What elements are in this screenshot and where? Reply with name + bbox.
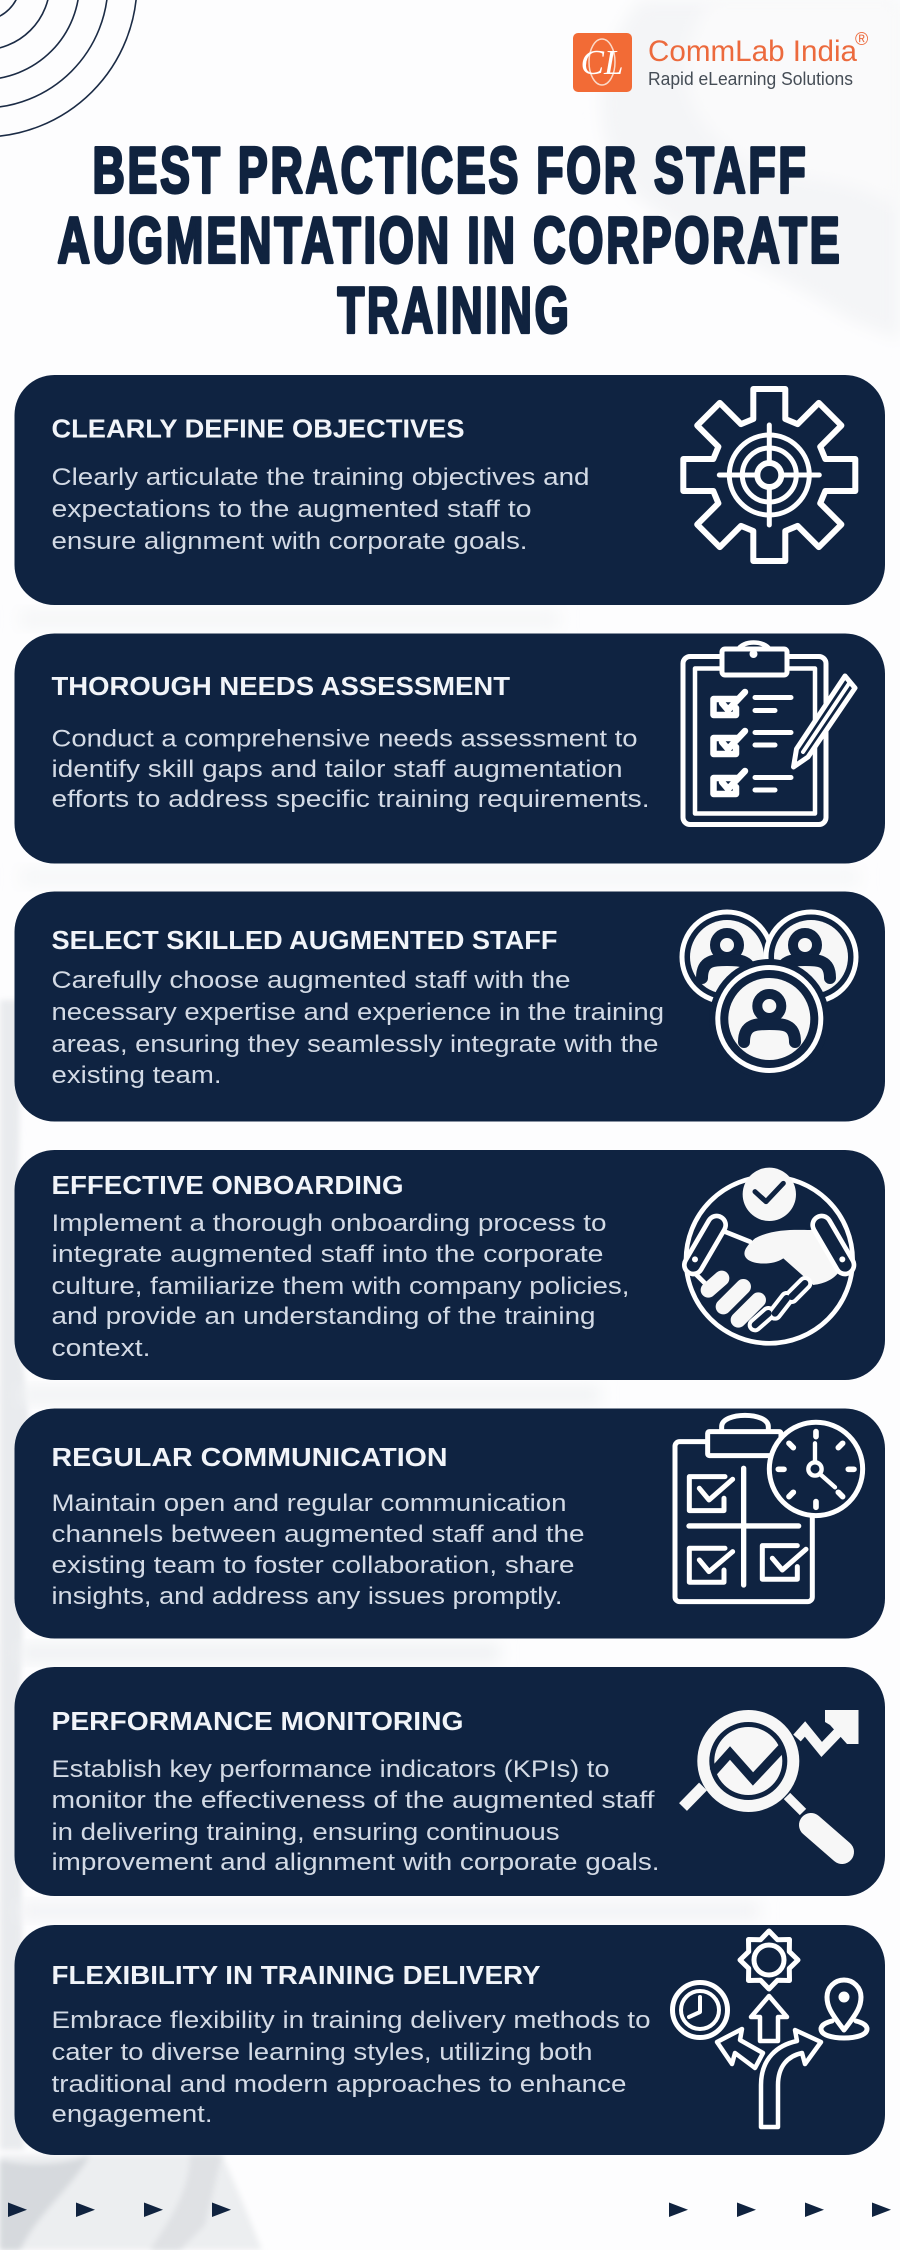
body text: [52, 967, 664, 1089]
registered mark: ®: [855, 29, 868, 49]
body text: [52, 726, 650, 813]
body text: in delivering training, ensuring continuous: [52, 1819, 560, 1846]
body text: monitor the effectiveness of the augmented staff: [52, 1787, 655, 1814]
body text: [52, 2007, 650, 2128]
arrows: bottom left row: [8, 2202, 231, 2217]
body text: traditional and modern approaches to enhance: [52, 2071, 626, 2098]
logo wordmark: CommLab India: [648, 35, 857, 68]
body text: improvement and alignment with corporate goals.: [52, 1849, 660, 1876]
panel: thorough needs assessment: [14, 634, 885, 864]
decorative concentric arcs: [0, 0, 137, 137]
body text: Embrace flexibility in training delivery methods to: [52, 2007, 650, 2034]
body text: channels between augmented staff and the: [52, 1521, 584, 1548]
panel: regular communication: [14, 1408, 885, 1638]
body text: engagement.: [52, 2101, 212, 2128]
body text: context.: [52, 1335, 150, 1362]
body text: [52, 1210, 630, 1362]
heading: THOROUGH NEEDS ASSESSMENT: [52, 671, 510, 701]
logo mark: CL: [581, 43, 623, 82]
body text: Establish key performance indicators (KPIs) to: [52, 1756, 610, 1783]
title: TRAINING: [338, 273, 572, 346]
heading: REGULAR COMMUNICATION: [52, 1442, 448, 1472]
heading: FLEXIBILITY IN TRAINING DELIVERY: [52, 1960, 540, 1990]
body text: identify skill gaps and tailor staff augmentation: [52, 756, 622, 783]
icon: handshake with check badge: [686, 1168, 853, 1343]
body text: expectations to the augmented staff to: [52, 496, 532, 523]
body text: culture, familiarize them with company policies,: [52, 1273, 630, 1300]
body text: Clearly articulate the training objectives and: [52, 464, 590, 491]
body text: [52, 464, 590, 555]
body text: areas, ensuring they seamlessly integrate with the: [52, 1031, 658, 1058]
body text: integrate augmented staff into the corporate: [52, 1241, 604, 1268]
body text: ensure alignment with corporate goals.: [52, 528, 528, 555]
panel: performance monitoring: [14, 1667, 885, 1896]
body text: [52, 1490, 584, 1610]
panel: clearly define objectives: [14, 375, 885, 605]
logo mark: [573, 33, 632, 92]
body text: Conduct a comprehensive needs assessment to: [52, 726, 638, 753]
heading: SELECT SKILLED AUGMENTED STAFF: [52, 925, 558, 955]
arrows: bottom right row: [669, 2202, 891, 2217]
body text: necessary expertise and experience in the training: [52, 999, 664, 1026]
icon: gear with target: [683, 389, 855, 561]
body text: Maintain open and regular communication: [52, 1490, 566, 1517]
body text: existing team to foster collaboration, share: [52, 1552, 574, 1579]
logo tagline: Rapid eLearning Solutions: [648, 69, 853, 89]
body text: Implement a thorough onboarding process to: [52, 1210, 606, 1237]
body text: and provide an understanding of the training: [52, 1303, 596, 1330]
icon: magnifier over trend line: [683, 1710, 858, 1852]
panel: select skilled augmented staff: [14, 892, 885, 1122]
heading: EFFECTIVE ONBOARDING: [52, 1170, 404, 1200]
body text: cater to diverse learning styles, utilizing both: [52, 2039, 592, 2066]
panel: effective onboarding: [14, 1150, 885, 1380]
icon: clipboard checklist with pencil: [683, 642, 855, 824]
title: [58, 134, 842, 346]
panel: flexibility in training delivery: [14, 1925, 885, 2155]
icon: checklist with clock: [675, 1415, 863, 1602]
heading: CLEARLY DEFINE OBJECTIVES: [52, 414, 465, 444]
body text: [52, 1756, 660, 1876]
body text: Carefully choose augmented staff with the: [52, 967, 570, 994]
body text: existing team.: [52, 1062, 222, 1089]
heading: PERFORMANCE MONITORING: [52, 1706, 464, 1736]
icon: three people in circles: [682, 912, 856, 1079]
body text: efforts to address specific training requirements.: [52, 786, 650, 813]
logo: CommLab India: [573, 29, 868, 92]
icon: forked path with gear, clock and pin: [672, 1931, 867, 2127]
body text: insights, and address any issues promptly.: [52, 1583, 562, 1610]
